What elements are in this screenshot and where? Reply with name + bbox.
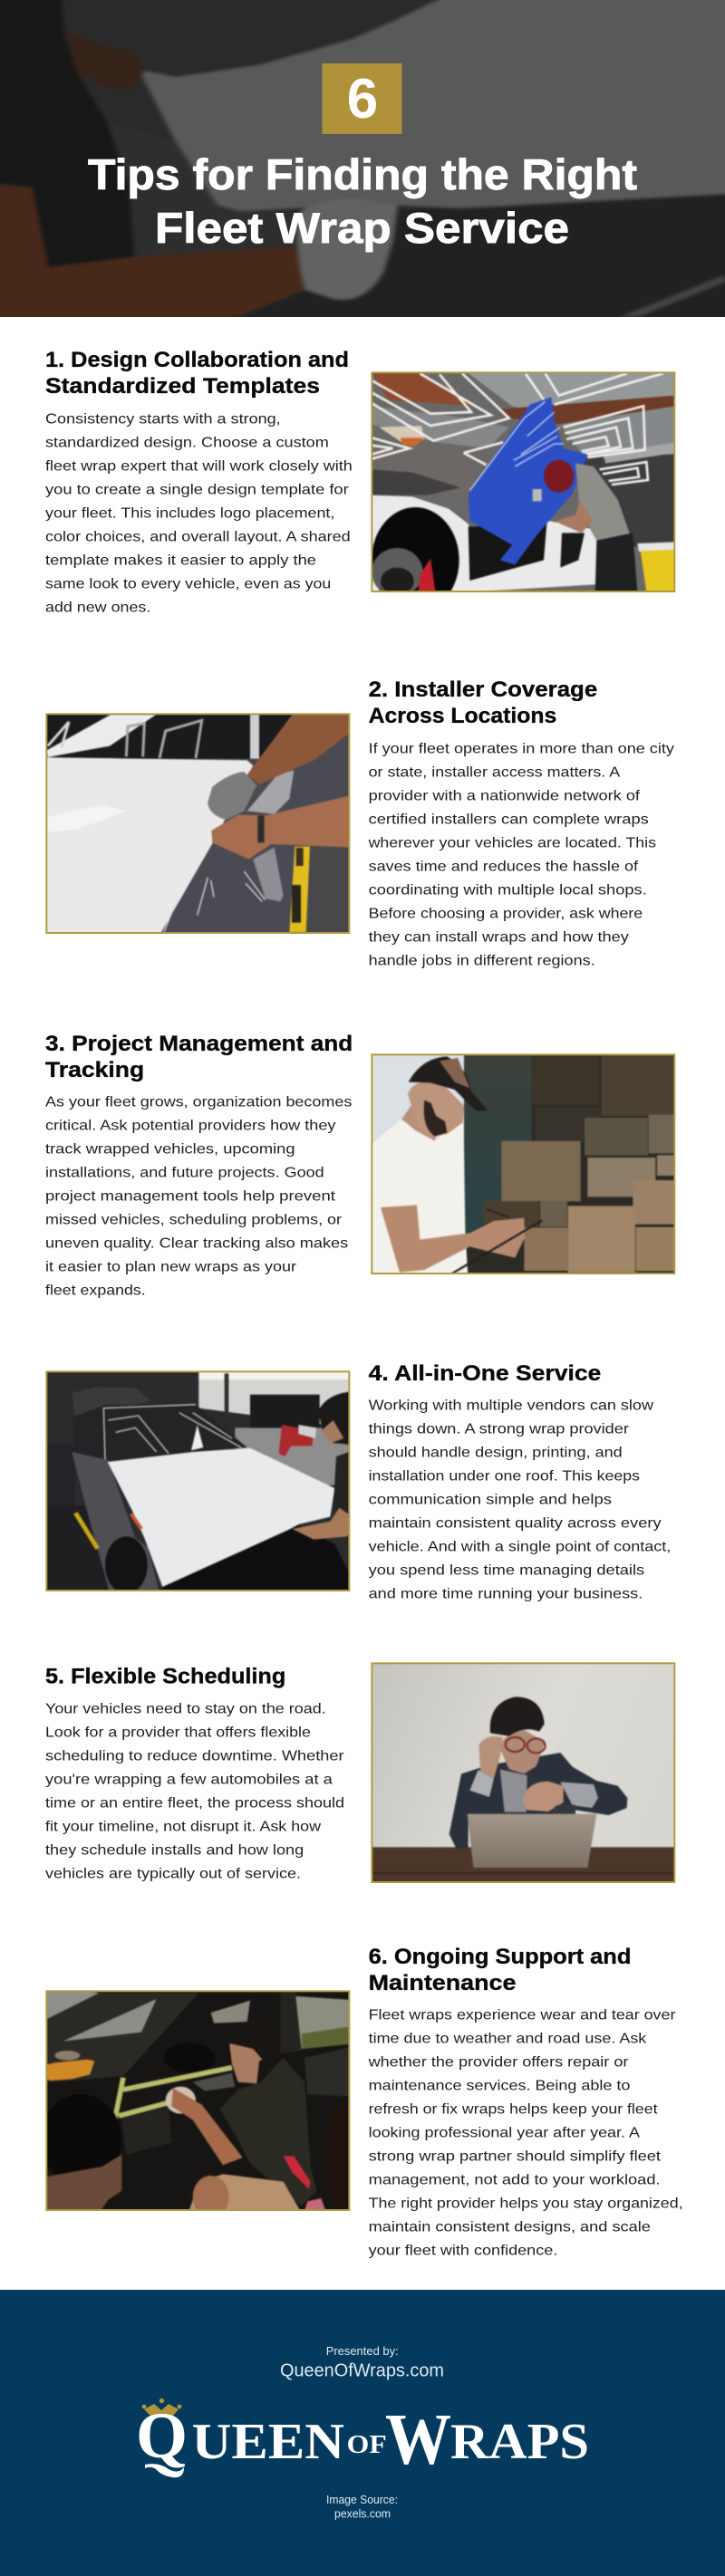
photo: installer applying blue wrap to a car panel [371, 371, 676, 592]
text: tip 3 body: uneven quality. Clear tracking also makes [45, 1235, 348, 1251]
text: tip 1 body: add new ones. [45, 600, 150, 615]
text: tip 6 body: time due to weather and road use. Ask [369, 2032, 647, 2047]
text: tip 4 body: and more time running your business. [369, 1587, 643, 1602]
panel: tip 4 [35, 1360, 671, 1602]
text: tip 3 body [45, 1094, 352, 1298]
panel: tip 6 [35, 1945, 683, 2259]
photo: gloved hands smoothing white vinyl on a hood [45, 713, 350, 934]
photo: technician polishing a black car door [45, 1990, 350, 2211]
text: tip 1 body: fleet wrap expert that will work closely with [45, 458, 353, 474]
text: tip 3 body: critical. Ask potential providers how they [45, 1118, 335, 1133]
text: tip 4 body: Working with multiple vendors can slow [369, 1399, 653, 1414]
heading: tip 2: Across Locations [369, 704, 556, 728]
heading: tip 4: 4. All-in-One Service [369, 1361, 601, 1386]
logo: Queen of Wraps: RAPS [450, 2414, 589, 2470]
text: tip 6 body: maintenance services. Being able to [369, 2079, 631, 2094]
heading: tip 1: 1. Design Collaboration and [45, 348, 349, 372]
text: tip 5 body: time or an entire fleet, the process should [45, 1795, 344, 1811]
text: tip 6 body: strong wrap partner should simplify fleet [369, 2149, 662, 2165]
text: tip 4 body: things down. A strong wrap provider [369, 1422, 630, 1437]
icon: crown [142, 2398, 181, 2420]
text: tip 3 body: As your fleet grows, organization becomes [45, 1094, 352, 1110]
text: tip 5 body: scheduling to reduce downtime. Whether [45, 1748, 344, 1764]
text: tip 5 body: Your vehicles need to stay on the road. [45, 1701, 326, 1716]
text: tip 4 body: you spend less time managing details [369, 1563, 644, 1579]
text: tip 5 body: they schedule installs and how long [45, 1842, 304, 1858]
text: tip 5 body [45, 1701, 344, 1881]
text: tip 6 body: management, not add to your workload. [369, 2173, 661, 2188]
panel: tip 1 [45, 348, 687, 615]
text: tip 6 body: maintain consistent designs, and scale [369, 2220, 651, 2235]
text: tip 1 body: Consistency starts with a strong, [45, 411, 281, 427]
text: tip 6 body: refresh or fix wraps helps keep your fleet [369, 2102, 658, 2118]
text: presented by: QueenOfWraps.com [280, 2361, 444, 2381]
text: tip 2 body: If your fleet operates in more than one city [369, 742, 674, 757]
text: tip 2 body: coordinating with multiple local shops. [369, 883, 647, 899]
text: tip 2 body: provider with a nationwide network of [369, 789, 641, 804]
number badge [323, 63, 402, 134]
text: tip 2 body: certified installers can complete wraps [369, 812, 649, 828]
text: image source: Image Source: [326, 2494, 398, 2506]
number badge: 6 [347, 68, 378, 130]
text: tip 1 body [45, 411, 353, 615]
heading: tip 2 [369, 678, 597, 728]
text: tip 6 body: your fleet with confidence. [369, 2244, 557, 2259]
text: tip 2 body: handle jobs in different regions. [369, 954, 595, 969]
text: tip 3 body: track wrapped vehicles, upcoming [45, 1141, 295, 1157]
header banner [0, 0, 725, 329]
text: tip 5 body: vehicles are typically out of service. [45, 1866, 301, 1881]
text: tip 4 body: maintain consistent quality across every [369, 1516, 662, 1532]
text: tip 4 body: communication simple and helps [369, 1493, 612, 1508]
text: tip 4 body: installation under one roof. This keeps [369, 1469, 640, 1485]
heading: tip 5: 5. Flexible Scheduling [45, 1665, 285, 1688]
text: image source: pexels.com [334, 2507, 391, 2520]
panel: tip 2 [35, 678, 674, 969]
text: tip 2 body: they can install wraps and how they [369, 930, 629, 946]
text: image source [326, 2494, 398, 2520]
title: Tips for Finding the Right [88, 150, 637, 198]
heading: tip 2: 2. Installer Coverage [369, 678, 597, 702]
text: presented by: Presented by: [326, 2344, 399, 2358]
logo: Queen of Wraps: UEEN [192, 2414, 344, 2470]
text: tip 3 body: it easier to plan new wraps as your [45, 1259, 297, 1274]
logo: Queen of Wraps: OF [347, 2431, 387, 2459]
text: tip 5 body: Look for a provider that offers flexible [45, 1725, 311, 1740]
heading: tip 6: 6. Ongoing Support and [369, 1945, 631, 1969]
text: tip 3 body: missed vehicles, scheduling problems, or [45, 1212, 343, 1227]
text: tip 2 body: Before choosing a provider, ask where [369, 907, 643, 922]
logo: Queen of Wraps: W [385, 2400, 451, 2480]
text: tip 1 body: color choices, and overall layout. A shared [45, 529, 351, 544]
title [88, 150, 637, 252]
text: tip 3 body: project management tools help prevent [45, 1188, 336, 1204]
text: tip 1 body: template makes it easier to apply the [45, 553, 316, 568]
heading: tip 3 [45, 1032, 353, 1082]
heading: tip 6 [369, 1945, 631, 1995]
heading: tip 3: Tracking [45, 1058, 144, 1082]
text: tip 3 body: fleet expands. [45, 1283, 146, 1298]
panel: tip 5 [45, 1651, 687, 1890]
text: tip 5 body: fit your timeline, not disrupt it. Ask how [45, 1819, 321, 1834]
text: tip 1 body: you to create a single design template for [45, 482, 349, 497]
text: tip 1 body: same look to every vehicle, even as you [45, 576, 331, 591]
text: tip 6 body: whether the provider offers repair or [367, 2055, 629, 2071]
photo: worker with clipboard beside cardboard boxes [371, 1053, 676, 1274]
text: tip 4 body: should handle design, printing, and [369, 1446, 623, 1461]
heading: tip 3: 3. Project Management and [45, 1032, 353, 1056]
text: tip 1 body: your fleet. This includes logo placement, [45, 505, 334, 521]
heading: tip 1: Standardized Templates [45, 374, 320, 399]
text: tip 2 body: wherever your vehicles are located. This [367, 836, 656, 851]
photo: businessman checking his watch at a laptop [371, 1662, 676, 1883]
text: tip 6 body [367, 2008, 683, 2259]
text: tip 2 body: or state, installer access matters. A [369, 765, 621, 781]
header photo: hands applying vinyl [0, 0, 725, 329]
heading: tip 1 [45, 348, 349, 399]
text: presented by [280, 2344, 444, 2381]
text: tip 6 body: Fleet wraps experience wear and tear over [369, 2008, 676, 2023]
logo: Queen of Wraps: Q [136, 2399, 188, 2472]
text: tip 2 body [367, 742, 674, 969]
panel: tip 3 [45, 1032, 687, 1298]
text: tip 6 body: looking professional year after year. A [369, 2126, 640, 2141]
title: Fleet Wrap Service [155, 204, 569, 252]
text: tip 6 body: The right provider helps you stay organized, [369, 2196, 683, 2212]
text: tip 4 body [369, 1399, 671, 1602]
text: tip 1 body: standardized design. Choose a custom [45, 435, 329, 450]
footer panel [0, 2290, 725, 2576]
text: tip 3 body: installations, and future projects. Good [45, 1165, 324, 1180]
heading: tip 6: Maintenance [369, 1971, 516, 1995]
text: tip 4 body: vehicle. And with a single point of contact, [369, 1540, 671, 1555]
logo: Queen of Wraps [136, 2398, 589, 2480]
text: tip 5 body: you're wrapping a few automobiles at a [45, 1772, 333, 1787]
photo: car hood covered in white vinyl with heat gun [45, 1370, 350, 1591]
text: tip 2 body: saves time and reduces the hassle of [369, 860, 639, 875]
